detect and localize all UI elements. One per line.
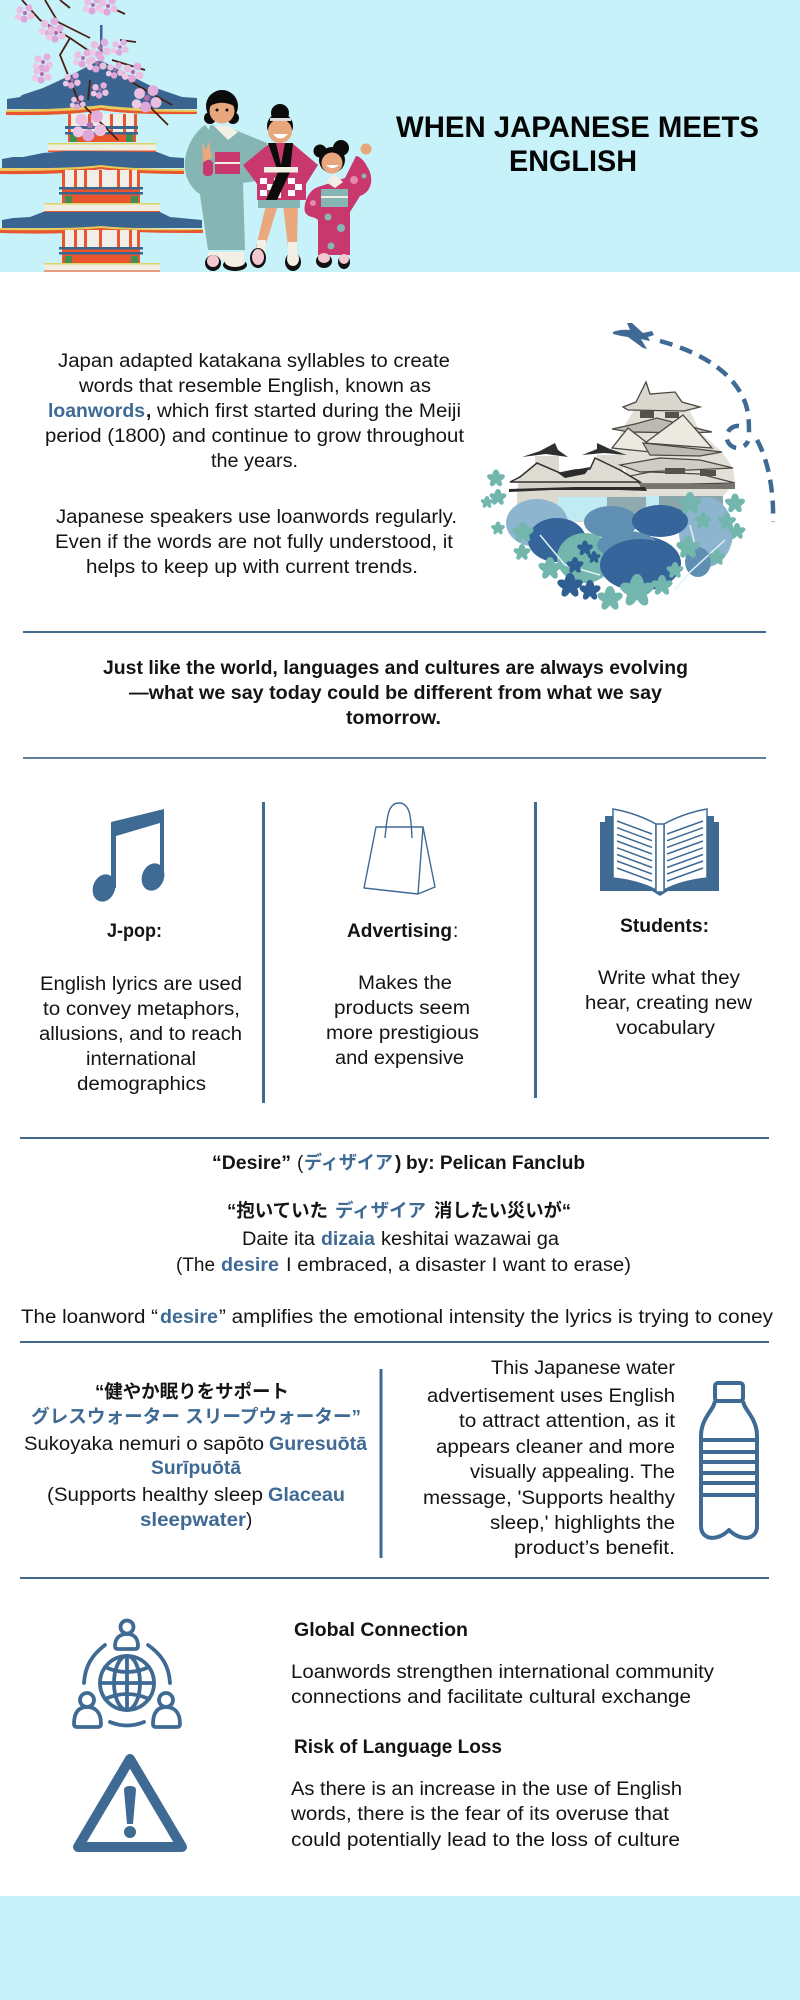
romanised lyric: dizaia xyxy=(321,1229,375,1250)
intro text block: words that resemble English, known as xyxy=(78,376,431,397)
illustration: girl in pink kimono xyxy=(305,140,372,269)
illustration: airplane with dashed route xyxy=(613,323,773,522)
song title: ( xyxy=(297,1153,304,1174)
key statement: Just like the world, languages and cultures are always evolving xyxy=(103,658,688,679)
panel: water advertisement explanation: to attract attention, as it xyxy=(459,1411,676,1432)
icon: water bottle xyxy=(701,1383,757,1538)
heading: Students: xyxy=(620,916,709,937)
intro text block: period (1800) and continue to grow throughout xyxy=(45,426,465,447)
intro text block: Japan adapted katakana syllables to create xyxy=(58,351,450,372)
panel: water advertisement slogan: Sukoyaka nemuri o sapōto xyxy=(24,1434,264,1455)
song title: by: Pelican Fanclub xyxy=(406,1153,585,1174)
heading: Advertising xyxy=(347,921,452,942)
divider xyxy=(20,1577,769,1579)
panel: water advertisement slogan: ) xyxy=(246,1510,252,1531)
body: more prestigious xyxy=(326,1023,479,1044)
panel: water advertisement slogan: Surīpuōtā xyxy=(151,1458,241,1479)
heading: J-pop: xyxy=(107,921,162,942)
icon: warning triangle xyxy=(78,1759,182,1847)
romanised lyric xyxy=(242,1229,559,1250)
panel: Desire lyric example xyxy=(21,1152,774,1328)
icon: open book xyxy=(600,809,719,896)
song title: ) xyxy=(395,1153,401,1174)
divider xyxy=(23,631,766,633)
body: English lyrics are used xyxy=(40,974,242,995)
Japanese lyric: ディザイア xyxy=(335,1200,426,1221)
icon: music note xyxy=(89,809,168,905)
title xyxy=(396,111,759,178)
castle foundation xyxy=(517,488,723,522)
body: vocabulary xyxy=(616,1018,716,1039)
intro text block: loanwords xyxy=(48,401,145,422)
body: products seem xyxy=(334,998,470,1019)
explanation: ” amplifies the emotional intensity the lyrics is trying to coney xyxy=(219,1307,774,1328)
panel: water advertisement slogan: Guresuōtā xyxy=(269,1434,367,1455)
heading: : xyxy=(453,921,458,942)
icon: shopping bag xyxy=(364,803,435,894)
Japanese lyric xyxy=(227,1200,571,1221)
panel: water advertisement explanation: appears cleaner and more xyxy=(436,1437,675,1458)
icon: global connection xyxy=(74,1620,180,1727)
body: demographics xyxy=(77,1074,206,1095)
intro text block: Even if the words are not fully understood, it xyxy=(55,532,454,553)
explanation: desire xyxy=(160,1307,218,1328)
divider xyxy=(23,757,766,759)
song title: ディザイア xyxy=(304,1152,393,1173)
panel: water advertisement explanation xyxy=(423,1358,676,1559)
panel: water advertisement explanation: sleep,' highlights the xyxy=(490,1513,675,1534)
panel: water advertisement slogan: “健やか眠りをサポート xyxy=(95,1381,289,1402)
panel: risk of language loss text: words, there is the fear of its overuse that xyxy=(290,1804,670,1825)
translated lyric: desire xyxy=(221,1255,279,1276)
title: ENGLISH xyxy=(509,145,637,178)
panel: global connection text xyxy=(291,1620,715,1708)
title: WHEN JAPANESE MEETS xyxy=(396,111,759,144)
panel: water advertisement slogan xyxy=(24,1381,367,1531)
explanation: The loanword “ xyxy=(21,1307,158,1328)
panel: J-pop xyxy=(39,809,242,1095)
panel: risk of language loss text: could potentially lead to the loss of culture xyxy=(291,1830,680,1851)
illustration: child in checked happi coat xyxy=(243,104,318,271)
body: allusions, and to reach xyxy=(39,1024,242,1045)
key statement: —what we say today could be different from what we say xyxy=(129,683,662,704)
song title: “Desire” xyxy=(212,1153,291,1174)
body xyxy=(326,973,479,1069)
panel: water advertisement explanation: advertisement uses English xyxy=(427,1386,675,1407)
panel: water advertisement explanation: message, 'Supports healthy xyxy=(423,1488,676,1509)
panel: global connection text: connections and facilitate cultural exchange xyxy=(291,1687,691,1708)
foliage flowers xyxy=(481,470,745,610)
body: hear, creating new xyxy=(585,993,752,1014)
panel: water advertisement explanation: visually appealing. The xyxy=(470,1462,675,1483)
panel: water advertisement explanation: product’s benefit. xyxy=(514,1538,675,1559)
illustration: cherry blossom branch xyxy=(15,0,172,141)
panel: water advertisement slogan: sleepwater xyxy=(140,1510,247,1531)
panel: global connection text: Loanwords strengthen international community xyxy=(291,1662,715,1683)
foliage xyxy=(506,497,733,591)
illustration: pagoda xyxy=(0,25,203,272)
Japanese lyric: “抱いていた xyxy=(227,1200,328,1221)
illustration: woman in teal kimono xyxy=(185,90,267,271)
body: international xyxy=(86,1049,196,1070)
intro text block: , xyxy=(146,401,151,422)
divider xyxy=(20,1137,769,1139)
translated lyric: I embraced, a disaster I want to erase) xyxy=(286,1255,631,1276)
panel: Advertising xyxy=(326,803,479,1069)
body: Write what they xyxy=(598,968,741,989)
intro text block: which first started during the Meiji xyxy=(156,401,461,422)
body: and expensive xyxy=(335,1048,464,1069)
panel: water advertisement slogan: グレスウォーター スリープウォーター” xyxy=(31,1406,361,1427)
panel: risk of language loss text: As there is an increase in the use of English xyxy=(291,1779,682,1800)
body: Makes the xyxy=(358,973,452,994)
footer band xyxy=(0,1896,800,2000)
romanised lyric: keshitai wazawai ga xyxy=(381,1229,559,1250)
body: to convey metaphors, xyxy=(43,999,240,1020)
panel: water advertisement slogan: (Supports healthy sleep xyxy=(47,1485,263,1506)
Japanese lyric: 消したい災いが“ xyxy=(434,1200,571,1221)
panel: risk of language loss text xyxy=(290,1737,682,1851)
header band xyxy=(0,0,800,272)
intro text block: helps to keep up with current trends. xyxy=(86,557,418,578)
song title xyxy=(212,1152,585,1174)
intro text block: the years. xyxy=(211,451,298,472)
body xyxy=(585,968,752,1039)
key statement: tomorrow. xyxy=(346,708,441,729)
intro text block: Japanese speakers use loanwords regularly. xyxy=(56,507,457,528)
panel: risk of language loss text: Risk of Language Loss xyxy=(294,1737,502,1758)
panel: water advertisement explanation: This Japanese water xyxy=(491,1358,676,1379)
translated lyric: (The xyxy=(176,1255,215,1276)
romanised lyric: Daite ita xyxy=(242,1229,315,1250)
divider xyxy=(20,1341,769,1343)
body xyxy=(39,974,242,1095)
panel: water advertisement slogan: Glaceau xyxy=(268,1485,345,1506)
illustration: Japanese castle with foliage xyxy=(481,382,745,610)
castle buildings xyxy=(509,382,735,496)
panel: global connection text: Global Connection xyxy=(294,1620,468,1641)
panel: Students xyxy=(585,809,752,1039)
explanation xyxy=(21,1307,774,1328)
key statement xyxy=(103,658,688,729)
intro text block xyxy=(45,351,465,578)
